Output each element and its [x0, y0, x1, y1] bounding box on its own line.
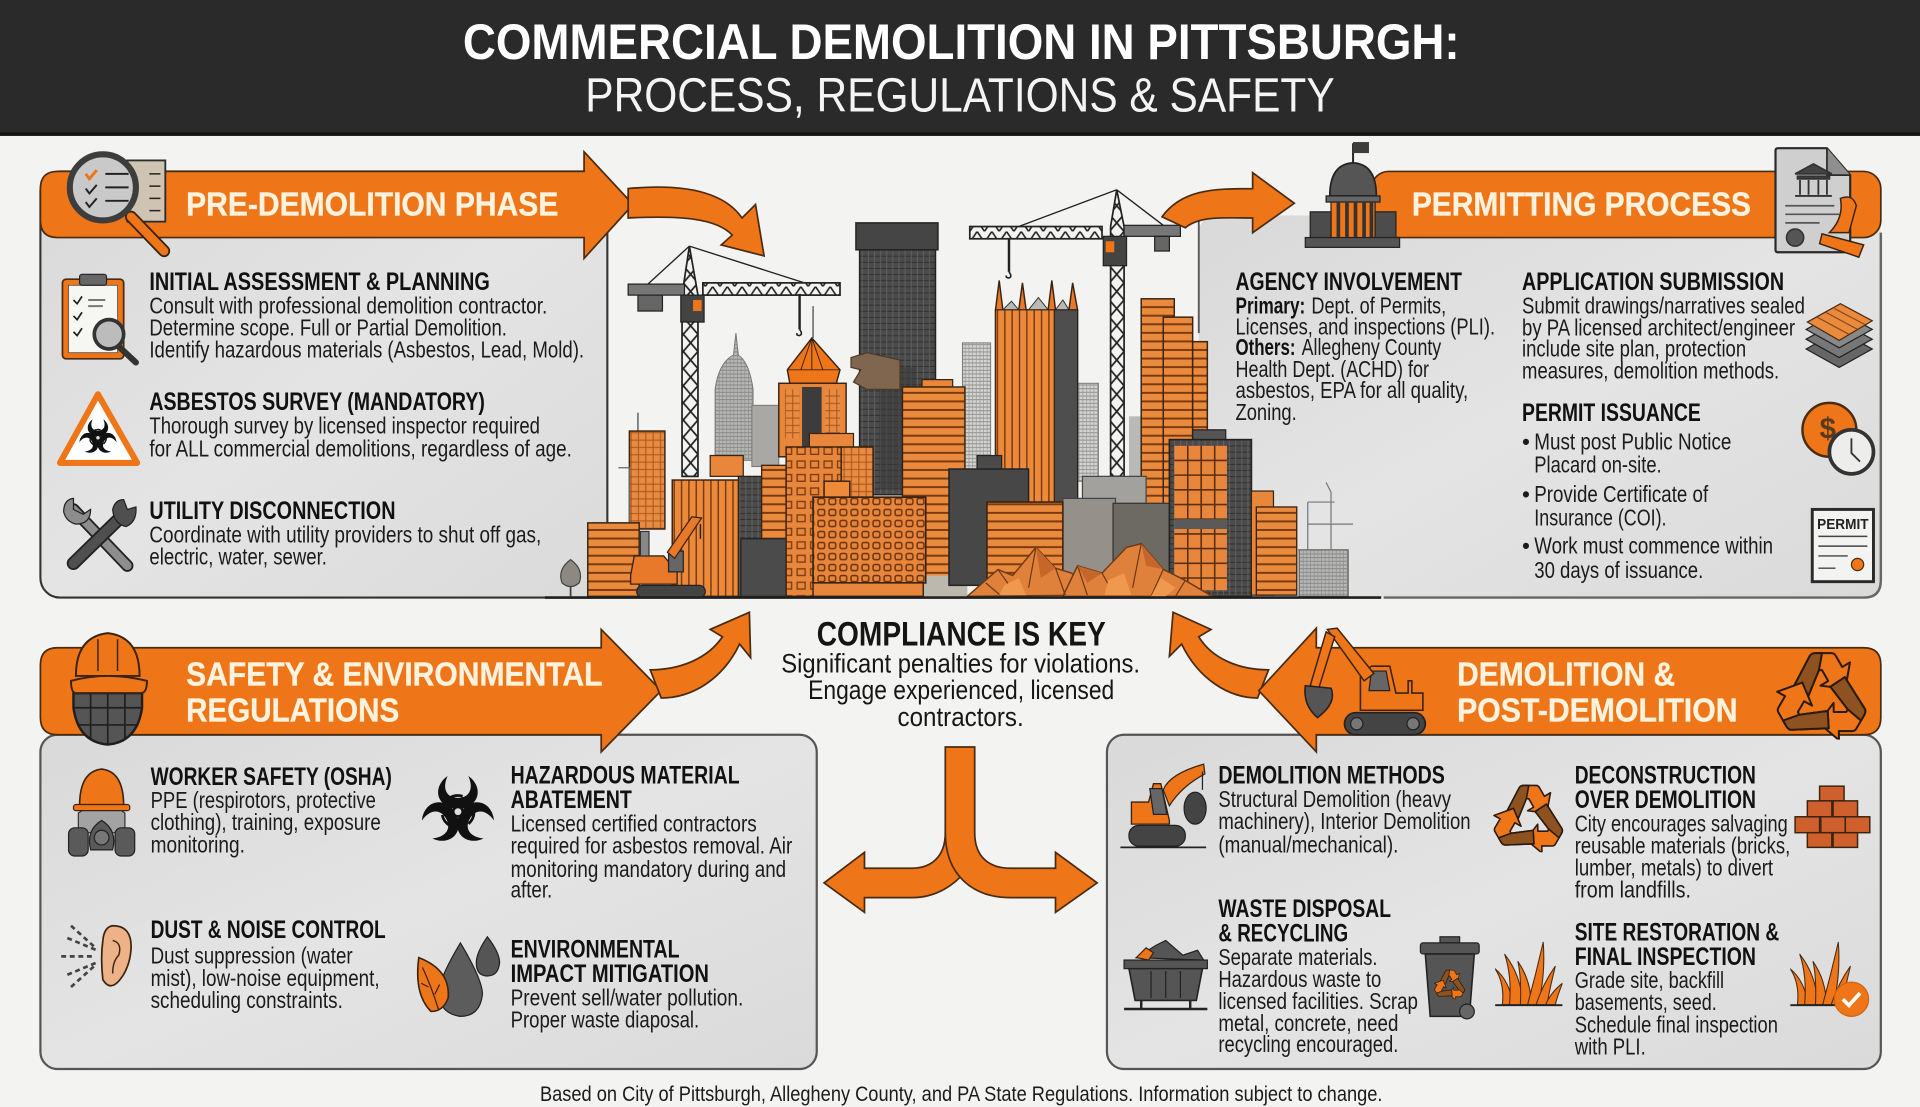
text: application submission: APPLICATION SUBMISSION — [1522, 268, 1784, 296]
panel: pre-demolition phase — [40, 152, 633, 598]
arrow: demolition to skyline — [1169, 612, 1269, 698]
icon: permit card — [1812, 509, 1873, 582]
icon: dumpster — [1124, 940, 1207, 1009]
panel: permitting process background — [1199, 216, 1881, 598]
text: permit issuance: Placard on-site. — [1534, 452, 1662, 478]
banner arrow: pre-demolition — [40, 152, 633, 258]
heading: safety and environmental regulations — [186, 657, 602, 729]
text: site restoration: Schedule final inspection — [1575, 1011, 1778, 1037]
icon: coin and clock — [1802, 403, 1873, 474]
heading: demolition and post-demolition — [1457, 657, 1738, 729]
text: permit issuance — [1522, 399, 1773, 583]
icon: grass with check mark — [1790, 942, 1869, 1016]
text: waste disposal and recycling: recycling encouraged. — [1218, 1031, 1398, 1057]
dark block — [949, 456, 1029, 585]
text: agency involvement: Primary: — [1236, 292, 1305, 318]
callout: compliance is key: Significant penalties for violations. — [781, 648, 1140, 678]
text: initial assessment: INITIAL ASSESSMENT & PLANNING — [149, 268, 490, 296]
icon: permit document with stamp — [1776, 148, 1864, 257]
header band — [0, 0, 1920, 136]
text: demolition methods: (manual/mechanical). — [1218, 831, 1398, 857]
text: environmental impact mitigation: Prevent sell/water pollution. — [511, 984, 743, 1010]
dark tower — [856, 223, 938, 495]
text: environmental impact mitigation: Proper waste diaposal. — [511, 1006, 699, 1032]
text: utility disconnection: UTILITY DISCONNECTION — [149, 497, 396, 525]
text: dust and noise control: scheduling constraints. — [151, 987, 343, 1013]
text: demolition methods: Structural Demolition (heavy — [1218, 786, 1452, 812]
icon: biohazard symbol — [417, 776, 499, 847]
callout: compliance is key: COMPLIANCE IS KEY — [817, 615, 1106, 653]
heading: demolition and post-demolition: POST-DEMOLITION — [1457, 692, 1738, 729]
text: agency involvement: AGENCY INVOLVEMENT — [1236, 268, 1463, 296]
text: asbestos survey: ASBESTOS SURVEY (MANDATORY) — [149, 388, 485, 416]
text: hazardous material abatement: ABATEMENT — [511, 786, 632, 814]
icon: stacked plans — [1806, 304, 1872, 367]
grey hatched block and scaffold — [1298, 482, 1353, 596]
text: deconstruction over demolition: OVER DEMOLITION — [1575, 786, 1756, 814]
text: demolition methods: DEMOLITION METHODS — [1218, 762, 1445, 790]
arrow: pre-demolition to skyline — [628, 187, 764, 256]
text: site restoration: Grade site, backfill — [1575, 967, 1724, 993]
callout: compliance is key: contractors. — [898, 702, 1024, 732]
icon: water spray and ear — [61, 926, 131, 987]
text: site restoration: basements, seed. — [1575, 989, 1717, 1015]
text: waste disposal and recycling: WASTE DISPOSAL — [1218, 895, 1391, 923]
text: application submission: by PA licensed architect/engineer — [1522, 315, 1795, 341]
icon: coin and clock: $ — [1820, 412, 1836, 445]
icon: hard hat over globe — [71, 633, 147, 745]
illustration: Pittsburgh skyline — [545, 190, 1381, 598]
banner arrow: safety — [40, 629, 661, 752]
text: agency involvement: Health Dept. (ACHD) for — [1236, 356, 1429, 382]
crane: right — [970, 190, 1180, 476]
text: application submission: Submit drawings/narratives sealed — [1522, 292, 1805, 318]
heading: permitting process: PERMITTING PROCESS — [1412, 187, 1751, 224]
text: worker safety: WORKER SAFETY (OSHA) — [151, 763, 392, 791]
text: hazardous material abatement: required for asbestos removal. Air — [511, 833, 793, 859]
arrow: safety to skyline — [650, 612, 751, 698]
text: initial assessment — [149, 268, 584, 363]
text: site restoration: SITE RESTORATION & — [1575, 918, 1779, 946]
text: dust and noise control: mist), low-noise equipment, — [151, 965, 380, 991]
text: permit issuance: Must post Public Notice — [1534, 428, 1731, 454]
text: demolition methods: machinery), Interior Demolition — [1218, 808, 1471, 834]
text: application submission: measures, demolition methods. — [1522, 357, 1779, 383]
icon: biohazard warning triangle — [60, 394, 137, 463]
title: COMMERCIAL DEMOLITION IN PITTSBURGH: — [463, 14, 1460, 70]
text: utility disconnection — [149, 497, 541, 570]
icon: mini excavator with ball — [1120, 764, 1206, 847]
heading: safety and environmental regulations: REGULATIONS — [186, 692, 399, 729]
vertical striped block — [672, 456, 762, 596]
text: agency involvement: Allegheny County — [1302, 334, 1442, 360]
stepped orange towers — [1141, 299, 1207, 507]
text: permit issuance: 30 days of issuance. — [1534, 557, 1703, 583]
text: waste disposal and recycling: & RECYCLING — [1218, 920, 1348, 948]
panel header: permitting process — [1305, 142, 1881, 257]
text: environmental impact mitigation — [511, 936, 743, 1032]
text: utility disconnection: electric, water, sewer. — [149, 544, 327, 570]
heading: safety and environmental regulations: SAFETY & ENVIRONMENTAL — [186, 657, 602, 694]
brown broken wall section — [851, 353, 900, 389]
heading: demolition and post-demolition: DEMOLITION & — [1457, 657, 1675, 694]
text: permit issuance: Work must commence within — [1534, 532, 1773, 559]
text: worker safety: PPE (respirotors, protective — [151, 787, 376, 813]
grid tower — [1169, 430, 1251, 596]
text: dust and noise control — [151, 916, 386, 1013]
text: application submission: include site plan, protection — [1522, 335, 1746, 361]
text: hazardous material abatement: after. — [511, 877, 552, 903]
icon: permit card: PERMIT — [1817, 517, 1869, 533]
text: waste disposal and recycling: metal, concrete, need — [1218, 1010, 1398, 1036]
text: dust and noise control: Dust suppression (water — [151, 943, 353, 969]
panel: safety and environmental regulations — [40, 629, 817, 1069]
orange low block — [762, 465, 786, 596]
icon: crossed wrenches — [64, 498, 136, 566]
far-left low block — [588, 523, 639, 596]
text: waste disposal and recycling: licensed facilities. Scrap — [1218, 988, 1418, 1014]
pyramid-roof building — [779, 338, 846, 457]
back grey tower with spire — [715, 333, 753, 460]
text: waste disposal and recycling — [1218, 895, 1418, 1057]
text: asbestos survey — [149, 388, 572, 462]
text: demolition methods — [1218, 762, 1471, 857]
icon: leaf and water drops — [418, 937, 500, 1016]
icon: grass — [1495, 942, 1562, 1006]
arrow: skyline to permitting — [1162, 173, 1294, 233]
banner arrow: demolition — [1259, 628, 1881, 752]
PPG tower — [996, 280, 1078, 502]
text: permit issuance: Insurance (COI). — [1534, 504, 1667, 530]
crane: left — [628, 246, 840, 476]
text: permit issuance: Provide Certificate of — [1534, 481, 1709, 507]
big striped tower — [902, 380, 967, 596]
text: agency involvement: Zoning. — [1236, 399, 1297, 425]
text: worker safety: clothing), training, exposure — [151, 809, 381, 835]
text: permit issuance: • — [1522, 481, 1530, 507]
text: agency involvement: Others: — [1236, 334, 1296, 360]
text: environmental impact mitigation: IMPACT MITIGATION — [511, 960, 709, 988]
tree — [561, 560, 580, 596]
text: deconstruction over demolition: from landfills. — [1575, 877, 1691, 903]
text: deconstruction over demolition: DECONSTRUCTION — [1575, 762, 1756, 790]
text: initial assessment: Determine scope. Full or Partial Demolition. — [149, 315, 507, 341]
text: hazardous material abatement: monitoring mandatory during and — [511, 856, 786, 882]
text: waste disposal and recycling: Hazardous waste to — [1218, 966, 1381, 992]
callout: compliance is key — [781, 615, 1140, 732]
panel content: permitting process — [1236, 268, 1873, 583]
rubble pile — [967, 544, 1212, 596]
icon: recycling symbol — [1769, 653, 1876, 746]
text: environmental impact mitigation: ENVIRONMENTAL — [511, 936, 680, 964]
front window block — [813, 481, 926, 596]
excavator: skyline — [631, 517, 705, 598]
text: utility disconnection: Coordinate with utility providers to shut off gas, — [149, 521, 541, 547]
small orange block right — [1251, 491, 1297, 595]
text: dust and noise control: DUST & NOISE CONTROL — [151, 916, 386, 944]
callout: compliance is key: Engage experienced, licensed — [808, 675, 1114, 705]
light grey towers — [962, 343, 991, 471]
text: agency involvement: Licenses, and inspections (PLI). — [1236, 313, 1495, 339]
icon: worker with respirator — [69, 769, 135, 856]
text: site restoration: with PLI. — [1574, 1033, 1646, 1059]
subtitle: PROCESS, REGULATIONS & SAFETY — [585, 69, 1335, 122]
arrow: fork to lower panels — [824, 747, 1097, 912]
text: permit issuance: • — [1522, 532, 1530, 559]
icon: recycle arrows — [1488, 785, 1570, 858]
text: agency involvement: Dept. of Permits, — [1311, 292, 1446, 318]
text: deconstruction over demolition: reusable materials (bricks, — [1575, 833, 1790, 859]
text: waste disposal and recycling: Separate materials. — [1218, 944, 1378, 970]
icon: clipboard with magnifier — [62, 274, 136, 362]
text: hazardous material abatement — [511, 762, 793, 903]
grey mid blocks — [1063, 476, 1172, 594]
panel: demolition and post-demolition — [1107, 628, 1881, 1069]
text: hazardous material abatement: HAZARDOUS MATERIAL — [511, 762, 740, 790]
low orange striped block — [987, 502, 1063, 583]
text: agency involvement: asbestos, EPA for all quality, — [1236, 377, 1468, 403]
text: asbestos survey: for ALL commercial demolitions, regardless of age. — [149, 436, 572, 462]
windowed block — [786, 433, 873, 596]
heading: pre-demolition phase: PRE-DEMOLITION PHASE — [186, 187, 558, 224]
icon: brick wall — [1795, 786, 1870, 847]
icon: excavator — [1305, 628, 1425, 735]
text: permit issuance: PERMIT ISSUANCE — [1522, 399, 1701, 427]
text: worker safety — [151, 763, 392, 857]
footer note: Based on City of Pittsburgh, Allegheny County, and PA State Regulations. Information subject to change. — [540, 1083, 1382, 1106]
icon: recycling bin — [1420, 937, 1479, 1019]
text: asbestos survey: Thorough survey by licensed inspector required — [149, 412, 540, 438]
text: site restoration — [1574, 918, 1779, 1059]
text: permit issuance: • — [1522, 428, 1530, 454]
text: deconstruction over demolition: lumber, metals) to divert — [1575, 855, 1774, 881]
text: worker safety: monitoring. — [151, 831, 245, 857]
icon: capitol building — [1305, 142, 1400, 247]
text: deconstruction over demolition: City encourages salvaging — [1575, 810, 1788, 836]
left orange tower — [594, 413, 665, 540]
text: deconstruction over demolition — [1575, 762, 1790, 903]
text: initial assessment: Identify hazardous materials (Asbestos, Lead, Mold). — [149, 337, 584, 363]
text: initial assessment: Consult with professional demolition contractor. — [149, 292, 547, 318]
text: hazardous material abatement: Licensed certified contractors — [511, 810, 757, 836]
text: site restoration: FINAL INSPECTION — [1575, 943, 1756, 971]
text: application submission — [1522, 268, 1805, 383]
ground line — [545, 596, 1381, 599]
text: agency involvement — [1236, 268, 1495, 425]
icon: magnifier on checklist — [70, 154, 165, 251]
